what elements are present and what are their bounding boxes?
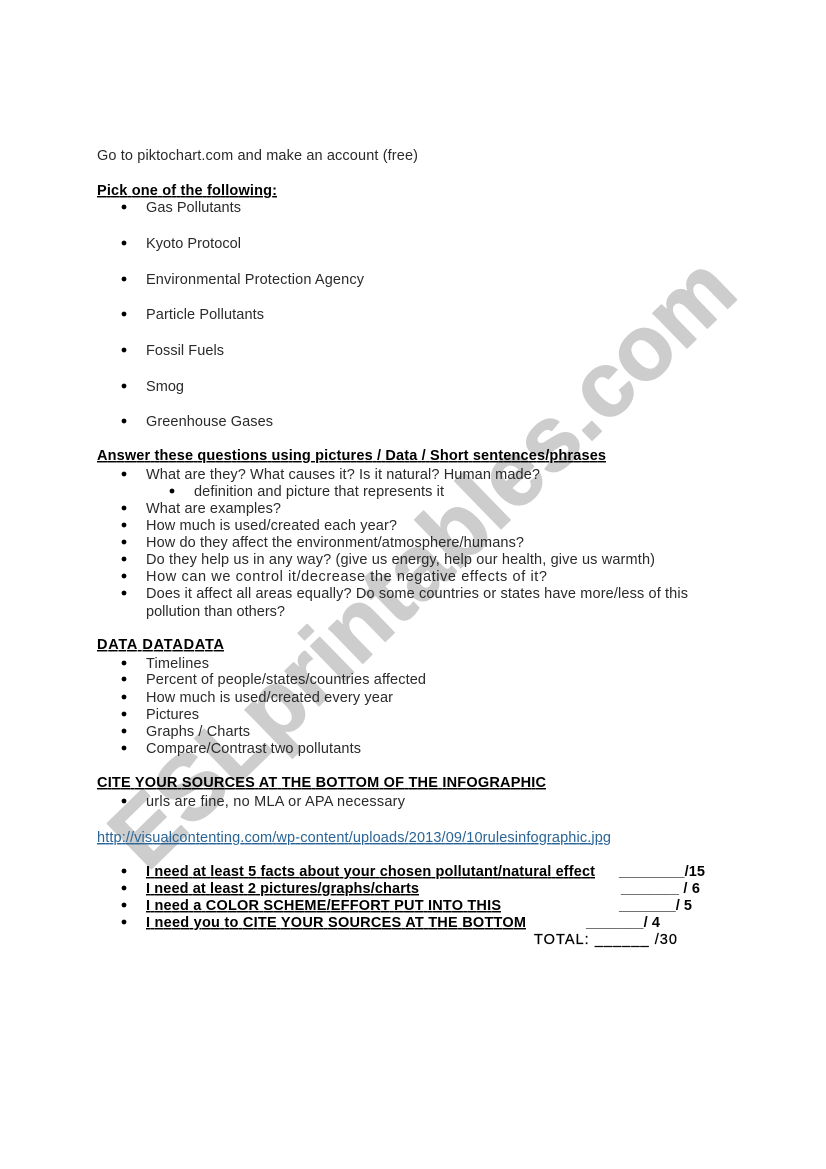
data list: Pictures [146, 707, 199, 723]
rubric item: color scheme [122, 898, 692, 914]
rubric item: facts: I need at least 5 facts about your chosen pollutant/natural effect [146, 864, 595, 880]
rubric item: color scheme: I need a COLOR SCHEME/EFFORT PUT INTO THIS [146, 898, 501, 914]
panel: grading rubric [122, 864, 705, 948]
watermark: ESLprintables.com: ESLprintables.com [90, 237, 755, 887]
panel: cite sources [97, 775, 611, 846]
heading: answer these questions: Answer these questions using pictures / Data / Short sentences/phrases [97, 448, 606, 464]
example link: http://visualcontenting.com/wp-content/uploads/2013/09/10rulesinfographic.jpg [97, 830, 611, 846]
sources note: urls are fine, no MLA or APA necessary [146, 794, 406, 810]
panel: pick a topic [97, 183, 365, 430]
data list [122, 656, 426, 757]
topic list: Particle Pollutants [146, 307, 264, 323]
data list: Percent of people/states/countries affected [146, 672, 426, 688]
question list: What are they? What causes it? Is it natural? Human made? [146, 467, 540, 483]
topic list [122, 200, 365, 430]
data list: Compare/Contrast two pollutants [146, 741, 361, 757]
question list: How do they affect the environment/atmosphere/humans? [146, 535, 524, 551]
rubric item: pictures [122, 881, 700, 897]
rubric item: cite: I need you to CITE YOUR SOURCES AT THE BOTTOM [146, 915, 526, 931]
rubric item: pictures: _______ / 6 [620, 881, 700, 897]
question list: Do they help us in any way? (give us energy, help our health, give us warmth) [146, 552, 655, 568]
question list [122, 467, 688, 620]
topic list: Greenhouse Gases [146, 414, 273, 430]
topic list: Environmental Protection Agency [146, 272, 365, 288]
question list: What are examples? [146, 501, 281, 517]
panel: questions [97, 448, 688, 620]
intro instruction: Go to piktochart.com and make an account (free) [97, 148, 418, 164]
data list: How much is used/created every year [146, 690, 393, 706]
topic list: Smog [146, 379, 184, 395]
data list: Graphs / Charts [146, 724, 250, 740]
heading: pick one: Pick one of the following: [97, 183, 277, 199]
question list: pollution than others? [146, 604, 285, 620]
topic list: Fossil Fuels [146, 343, 224, 359]
question list: How much is used/created each year? [146, 518, 397, 534]
rubric item: color scheme: _______/ 5 [618, 898, 692, 914]
topic list: Gas Pollutants [146, 200, 241, 216]
rubric total: TOTAL: ______ /30 [534, 932, 677, 948]
panel: data [97, 637, 426, 757]
question list: How can we control it/decrease the negative effects of it? [146, 569, 547, 585]
question list: Does it affect all areas equally? Do some countries or states have more/less of this [146, 586, 688, 602]
question list: definition and picture that represents it [194, 484, 444, 500]
topic list: Kyoto Protocol [146, 236, 241, 252]
heading: data: DATA DATADATA [97, 637, 225, 653]
data list: Timelines [146, 656, 209, 672]
rubric item: facts: ________/15 [618, 864, 705, 880]
rubric item: pictures: I need at least 2 pictures/graphs/charts [146, 881, 419, 897]
heading: cite your sources: CITE YOUR SOURCES AT THE BOTTOM OF THE INFOGRAPHIC [97, 775, 547, 791]
rubric item: cite: _______/ 4 [585, 915, 660, 931]
